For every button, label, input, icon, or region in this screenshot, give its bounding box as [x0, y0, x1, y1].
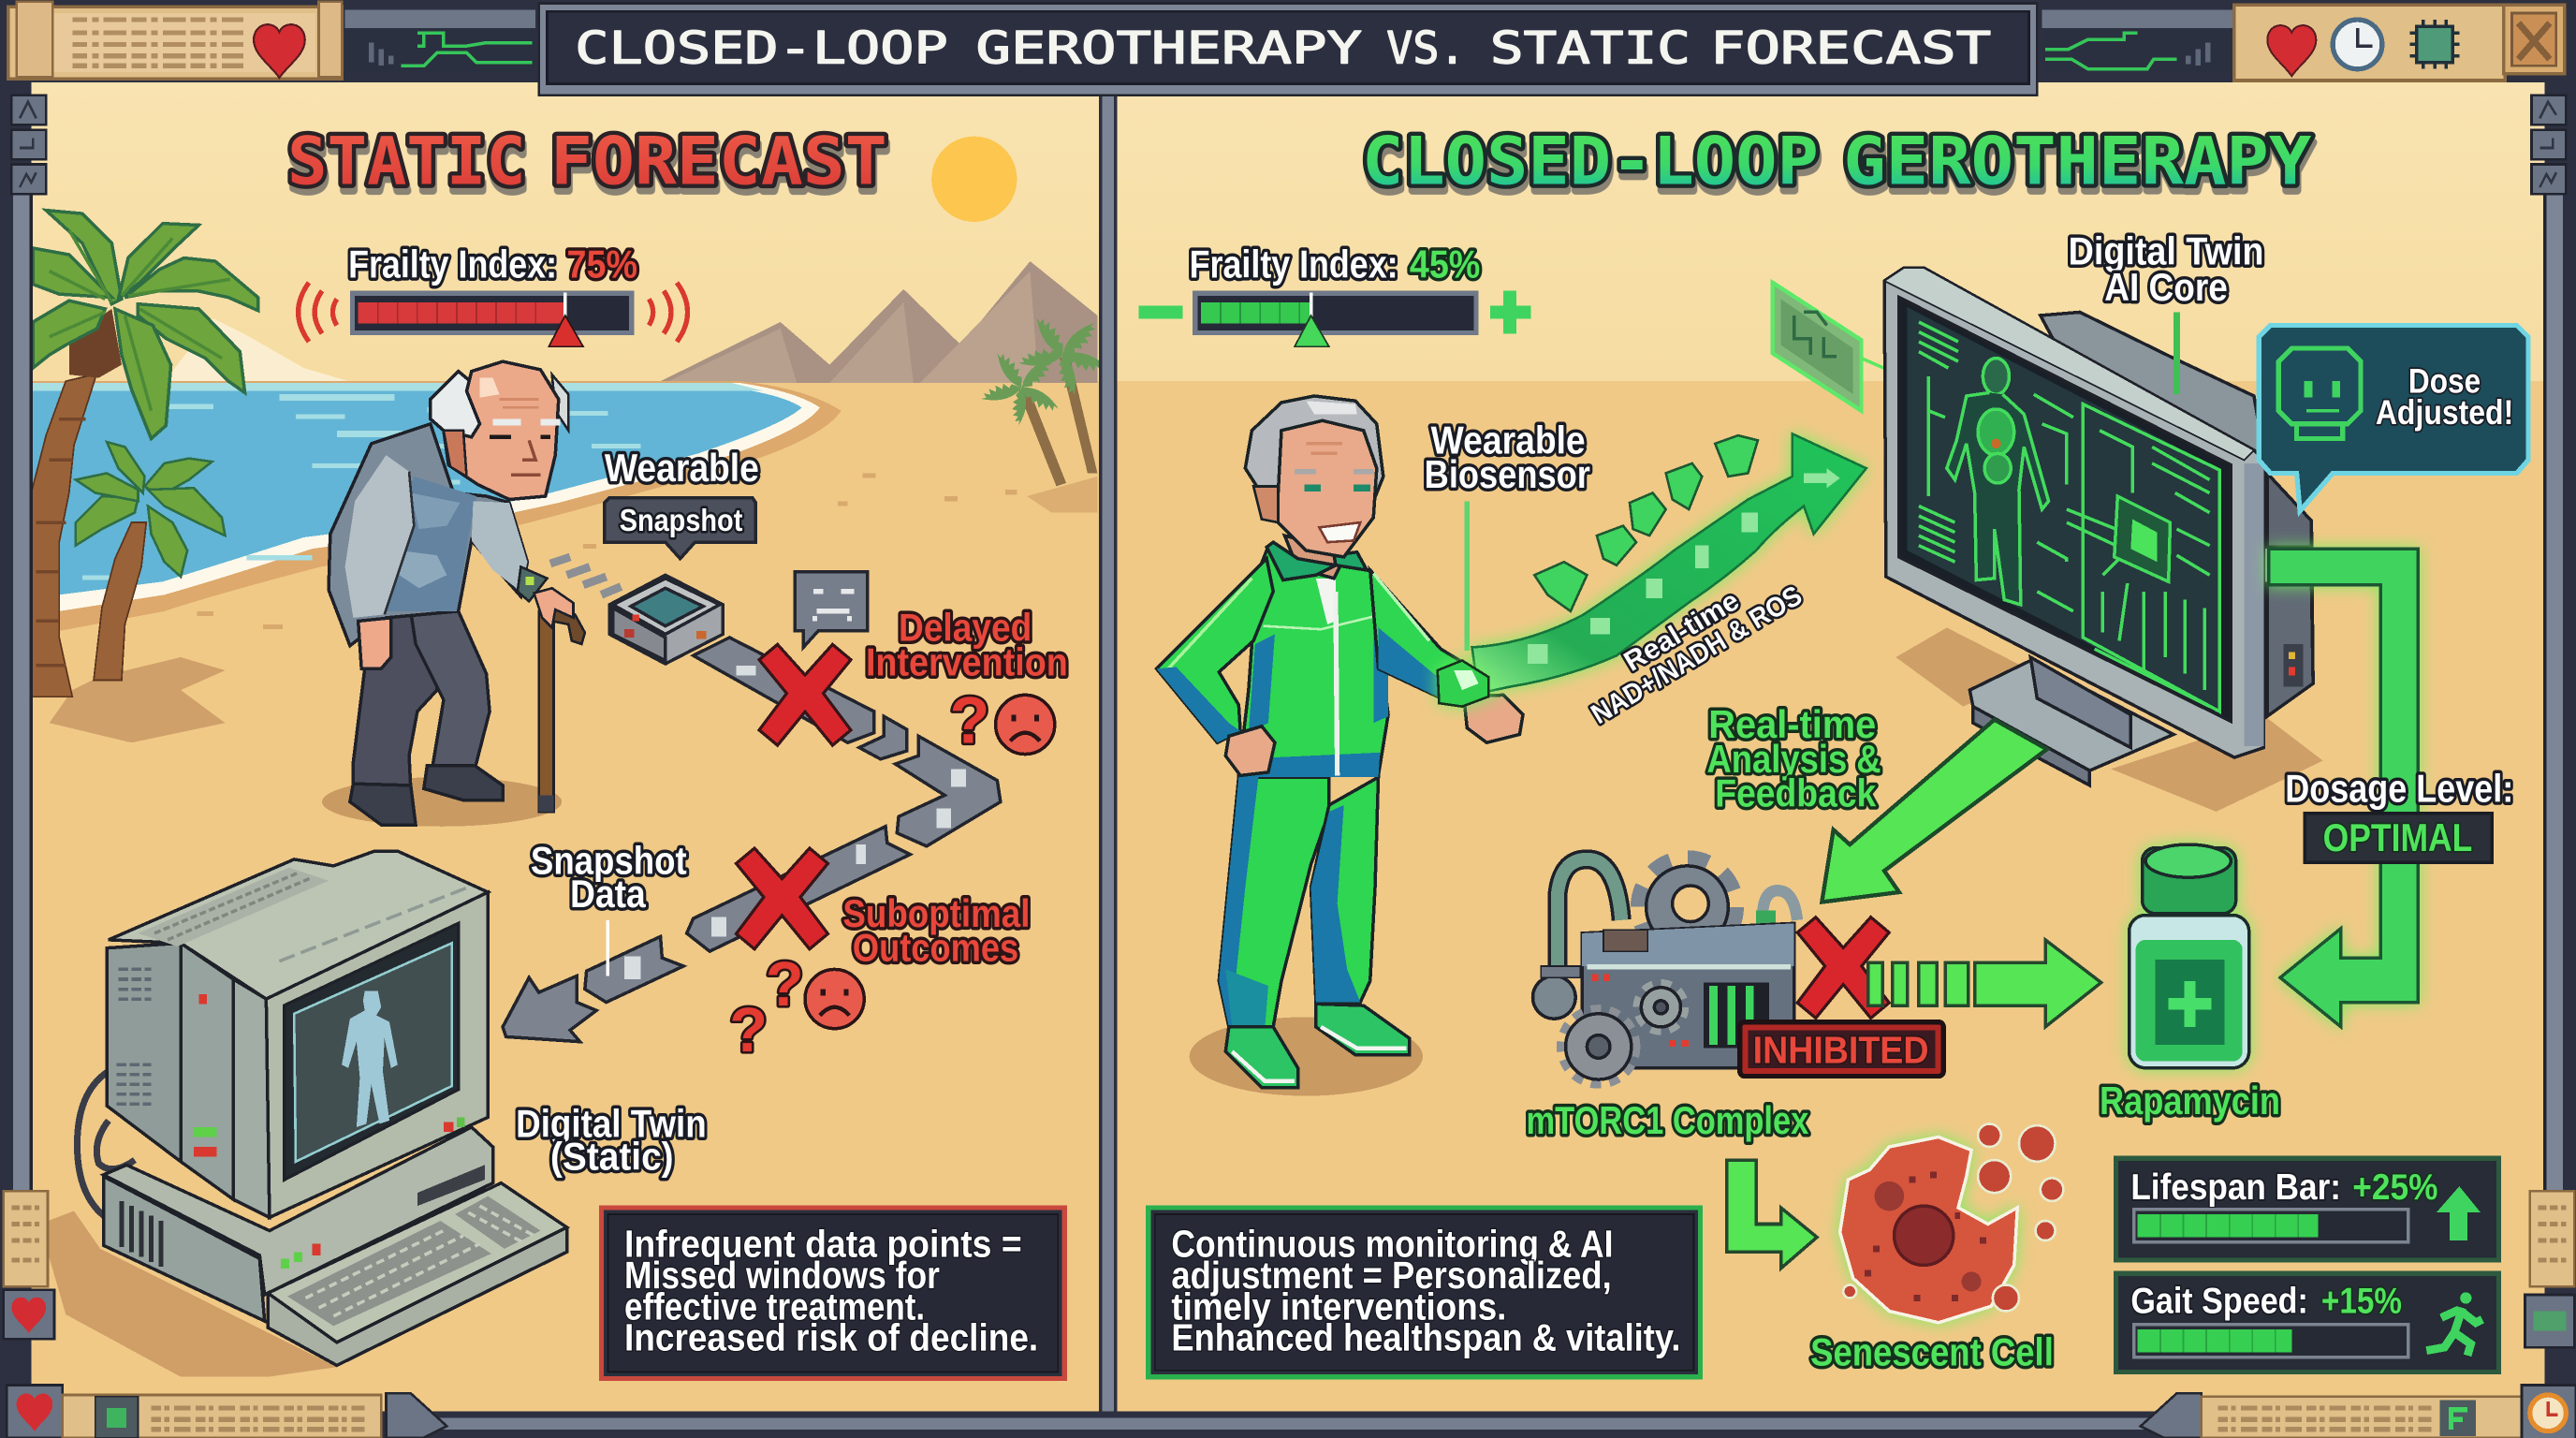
trunk	[31, 374, 95, 697]
right parchment tower	[2530, 1191, 2574, 1286]
icon: chip	[2410, 20, 2459, 69]
rapamycin bottle	[2130, 844, 2249, 1068]
eyes	[1305, 486, 1370, 490]
frailty value 45%: 45%	[1410, 242, 1480, 286]
senescent cell label: Senescent Cell	[1810, 1329, 2054, 1373]
digital twin ai core label: Digital Twin	[2069, 229, 2263, 273]
shadow	[39, 1211, 337, 1377]
title banner: VS.	[1386, 23, 1466, 75]
gait speed panel	[2116, 1273, 2498, 1372]
nose and mouth	[511, 440, 540, 475]
smile	[1319, 522, 1360, 542]
snapshot data label: Data	[570, 872, 646, 916]
frailty bar	[350, 291, 634, 346]
man shadow	[1190, 1017, 1423, 1096]
neck	[1284, 536, 1347, 579]
digital twin monitor	[1884, 268, 2313, 785]
bottom right parchment strip	[2202, 1397, 2522, 1438]
dashed arrow to bottle	[1868, 940, 2101, 1027]
caption: static forecast	[601, 1208, 1064, 1378]
rapamycin label: Rapamycin	[2100, 1078, 2280, 1123]
dosage level label: Dosage Level:	[2285, 766, 2513, 810]
signal dashes	[550, 557, 621, 594]
left leg	[1219, 777, 1329, 1027]
screen	[1899, 298, 2231, 721]
hair	[431, 372, 480, 440]
large gear teeth	[1641, 861, 1734, 953]
palm tree large	[31, 211, 258, 697]
question mark and sad face	[949, 682, 1055, 756]
red indicators	[1592, 975, 1599, 981]
data flow highlights	[624, 666, 966, 979]
digital twin ai core label	[2069, 229, 2263, 394]
frailty value 75%: 75%	[567, 242, 637, 286]
warning waves right	[649, 283, 688, 342]
monitor front	[266, 892, 488, 1217]
chip	[2115, 496, 2170, 581]
snapshot data label	[531, 839, 687, 916]
real-time nad label: Real-time	[1618, 585, 1745, 678]
cane	[539, 611, 554, 812]
chest line	[1264, 616, 1375, 629]
digital twin static label	[516, 1101, 707, 1179]
wearable device	[609, 575, 723, 664]
collar	[1266, 542, 1336, 580]
heading: closed-loop gerotherapy: GEROTHERAPY	[1843, 124, 2311, 200]
data flow path, broken	[503, 638, 1001, 1042]
wearable biosensor label: Wearable	[1431, 418, 1586, 462]
delayed intervention label: Delayed	[899, 605, 1032, 649]
real-time analysis label: Analysis &	[1707, 737, 1881, 781]
frailty bar	[1193, 291, 1479, 346]
inhibited x mark	[1797, 917, 1889, 1018]
large gear	[1647, 866, 1728, 948]
snapshot bubble	[605, 498, 755, 559]
right leg	[411, 611, 490, 769]
sad message bubble	[795, 572, 868, 647]
dose adjusted bubble: Adjusted!	[2376, 393, 2513, 432]
feedback pipe to rapamycin	[2269, 549, 2418, 1027]
vest	[386, 477, 476, 611]
brows	[1295, 470, 1373, 473]
dose adjusted bubble	[2259, 325, 2528, 511]
mtorc1 complex label: mTORC1 Complex	[1526, 1098, 1809, 1142]
wearable biosensor label: Biosensor	[1425, 452, 1590, 496]
right leg	[1311, 777, 1379, 1003]
close button	[2504, 5, 2565, 74]
highlight of bald head	[480, 378, 500, 398]
left toolbar buttons	[11, 95, 46, 194]
real-time analysis label: Real-time	[1708, 702, 1876, 746]
left hand	[359, 618, 391, 668]
snapshot data label: Snapshot	[531, 839, 687, 883]
top right circuit plate	[2042, 10, 2232, 72]
digital twin ai core label: AI Core	[2104, 265, 2228, 309]
suboptimal outcomes label	[842, 891, 1030, 970]
red x marks	[736, 644, 851, 949]
torso	[1238, 550, 1388, 775]
distant palms	[978, 313, 1108, 513]
mountains	[657, 261, 1097, 383]
digital twin static label: Digital Twin	[516, 1101, 707, 1145]
waistband	[1238, 753, 1380, 777]
sand ground	[31, 381, 1101, 1416]
right sleeve	[472, 501, 527, 592]
delayed intervention label	[866, 605, 1068, 683]
caption: closed-loop: Continuous monitoring & AI	[1171, 1223, 1613, 1266]
left heart tile	[4, 1290, 54, 1339]
question mark and sad face: ?	[949, 682, 989, 756]
frailty index label: Frailty Index:	[1190, 242, 1398, 286]
frailty index label: Frailty Index:	[348, 242, 557, 286]
top left parchment	[8, 2, 342, 79]
lifespan bar panel	[2116, 1158, 2498, 1260]
base left face	[104, 1177, 265, 1321]
heading: closed-loop gerotherapy: CLOSED-LOOP	[1362, 124, 1819, 200]
face	[1278, 420, 1377, 557]
circuit board outline	[2083, 404, 2219, 712]
shadow	[322, 777, 562, 827]
screen	[285, 923, 459, 1180]
stomach	[1984, 453, 2011, 483]
bottom left parchment strip	[63, 1395, 381, 1438]
feedback arrow to mtorc1	[1822, 720, 2047, 902]
middle section	[181, 943, 233, 1199]
center divider	[1099, 95, 1117, 1416]
palm tree small	[76, 442, 225, 681]
shoes	[350, 784, 416, 825]
brown valve	[1603, 930, 1647, 951]
minus icon	[1138, 305, 1183, 318]
gait speed panel: +15%	[2321, 1281, 2402, 1321]
panel: static forecast	[31, 82, 1108, 1416]
bezel	[1884, 268, 2263, 757]
suboptimal outcomes label: Outcomes	[853, 926, 1018, 970]
clock tile	[2522, 1385, 2576, 1438]
icon: clock	[2333, 20, 2382, 69]
hair	[1245, 396, 1383, 501]
hand on hip	[1225, 726, 1275, 775]
front side	[233, 979, 270, 1217]
arm left	[1157, 559, 1273, 742]
sand ground	[1116, 381, 2545, 1416]
vent on top	[138, 868, 329, 946]
frame side rails	[13, 194, 2563, 1196]
cell fragments	[1843, 1123, 2063, 1312]
caption: closed-loop: adjustment = Personalized,	[1171, 1254, 1612, 1297]
face	[444, 361, 559, 500]
right status tile	[2525, 1295, 2574, 1347]
heading: closed-loop gerotherapy	[1362, 124, 2311, 200]
lower heart tile	[7, 1385, 63, 1438]
suboptimal outcomes label: Suboptimal	[842, 891, 1030, 935]
wrist sensor glow	[1438, 661, 1488, 707]
traces	[2067, 431, 2210, 707]
data line connector	[607, 920, 608, 976]
fronds	[33, 211, 258, 439]
plus icon	[1490, 291, 1531, 333]
heading: static forecast	[287, 124, 887, 200]
bottom bar	[0, 1393, 2576, 1438]
caption: static forecast: Increased risk of decline.	[624, 1316, 1038, 1359]
left leg	[353, 611, 437, 788]
title banner: STATIC	[1490, 23, 1690, 75]
beach haze	[165, 318, 348, 381]
body	[1582, 923, 1794, 1068]
sun	[931, 137, 1017, 222]
snapshot bubble: Snapshot	[620, 504, 742, 538]
question marks and sad face: ?	[766, 950, 804, 1020]
status lights	[194, 1127, 217, 1137]
forehead wrinkles	[500, 399, 539, 407]
keyboard	[268, 1183, 567, 1365]
heading: static forecast: STATIC	[287, 124, 526, 200]
sea and beach	[31, 381, 842, 638]
caption: static forecast: Missed windows for	[624, 1254, 940, 1297]
mtorc1 machine	[1532, 859, 1797, 1083]
twin silhouette	[342, 990, 398, 1127]
caption: closed-loop: timely interventions.	[1171, 1284, 1506, 1328]
real-time nad label: NAD+/NADH & ROS	[1586, 580, 1808, 730]
title banner: FORECAST	[1710, 23, 1991, 75]
warning waves left	[299, 283, 337, 342]
title banner	[539, 4, 2037, 95]
active man figure	[1157, 396, 1523, 1088]
inhibited badge: INHIBITED	[1753, 1029, 1928, 1072]
sand specks	[198, 473, 1017, 629]
delayed intervention label: Intervention	[866, 639, 1068, 683]
question marks and sad face	[729, 950, 864, 1065]
lifespan bar panel: Lifespan Bar:	[2130, 1167, 2341, 1208]
brows	[493, 420, 561, 424]
body outline	[1983, 359, 2009, 394]
wearable label: Wearable	[605, 446, 759, 490]
top left circuit plate	[345, 10, 535, 72]
stand base	[1969, 661, 2174, 770]
screen: body scan and circuits	[1919, 322, 2219, 712]
caption: closed-loop: Enhanced healthspan & vitality.	[1171, 1316, 1680, 1359]
monitor back	[2041, 312, 2313, 716]
small gear teeth	[1562, 1010, 1634, 1083]
dose adjusted bubble: Dose	[2408, 361, 2481, 400]
sand shadow under palms	[50, 657, 225, 742]
wearable biosensor label	[1425, 418, 1590, 651]
left sleeve	[345, 455, 414, 618]
side pump	[1532, 976, 1575, 1019]
icon: heart	[2267, 25, 2316, 76]
ear	[1253, 486, 1278, 522]
gait speed panel: Gait Speed:	[2130, 1281, 2308, 1321]
arm right	[1370, 570, 1488, 698]
side of case	[107, 943, 181, 1162]
eyes	[490, 436, 550, 438]
vents	[1704, 983, 1769, 1049]
caption: static forecast: Infrequent data points =	[624, 1223, 1022, 1266]
bark rings	[37, 419, 85, 666]
real-time data stream arrow	[1472, 433, 1866, 694]
title banner: GEROTHERAPY	[976, 23, 1362, 75]
medium gear	[1638, 984, 1684, 1030]
torso silhouette	[329, 424, 527, 646]
hologram panel	[1773, 283, 1928, 411]
right toolbar buttons	[2532, 95, 2566, 194]
wrist wearable	[518, 566, 547, 601]
caption: static forecast: effective treatment.	[624, 1284, 925, 1328]
sky	[1116, 82, 2545, 383]
hose right	[1763, 890, 1797, 953]
retro computer	[39, 851, 567, 1377]
optimal badge: OPTIMAL	[2323, 815, 2472, 859]
caption: closed-loop	[1149, 1208, 1701, 1377]
digital twin static label: (Static)	[550, 1135, 674, 1179]
text blocks	[1919, 322, 1958, 562]
bottom left parchment tower	[4, 1191, 48, 1286]
base slot	[417, 1165, 485, 1206]
heading: static forecast: FORECAST	[550, 124, 887, 200]
real-time analysis label	[1707, 702, 1881, 815]
sky	[31, 82, 1101, 383]
hose left	[1558, 859, 1621, 969]
base top	[104, 1127, 493, 1295]
question marks and sad face: ?	[729, 996, 768, 1065]
l-shaped arrow	[1727, 1160, 1817, 1269]
right hand	[534, 588, 574, 627]
forehead	[1306, 444, 1342, 453]
side line	[1928, 376, 2073, 611]
real-time analysis label: Feedback	[1715, 771, 1877, 815]
data packets	[1534, 435, 1758, 611]
shoes	[1225, 1027, 1298, 1088]
panel: closed-loop gerotherapy	[1116, 82, 2545, 1416]
hand	[1464, 695, 1523, 742]
cable	[77, 1071, 135, 1219]
shirt and zip	[1316, 579, 1336, 624]
old man figure	[322, 361, 585, 827]
top right parchment	[2234, 5, 2505, 81]
title banner: CLOSED-LOOP	[575, 23, 948, 75]
ear	[444, 431, 466, 477]
monitor shadows	[1895, 627, 2323, 812]
senescent cell	[1840, 1137, 2017, 1323]
lifespan bar panel: +25%	[2352, 1167, 2438, 1208]
top	[109, 851, 488, 999]
lungs	[1978, 409, 2014, 455]
